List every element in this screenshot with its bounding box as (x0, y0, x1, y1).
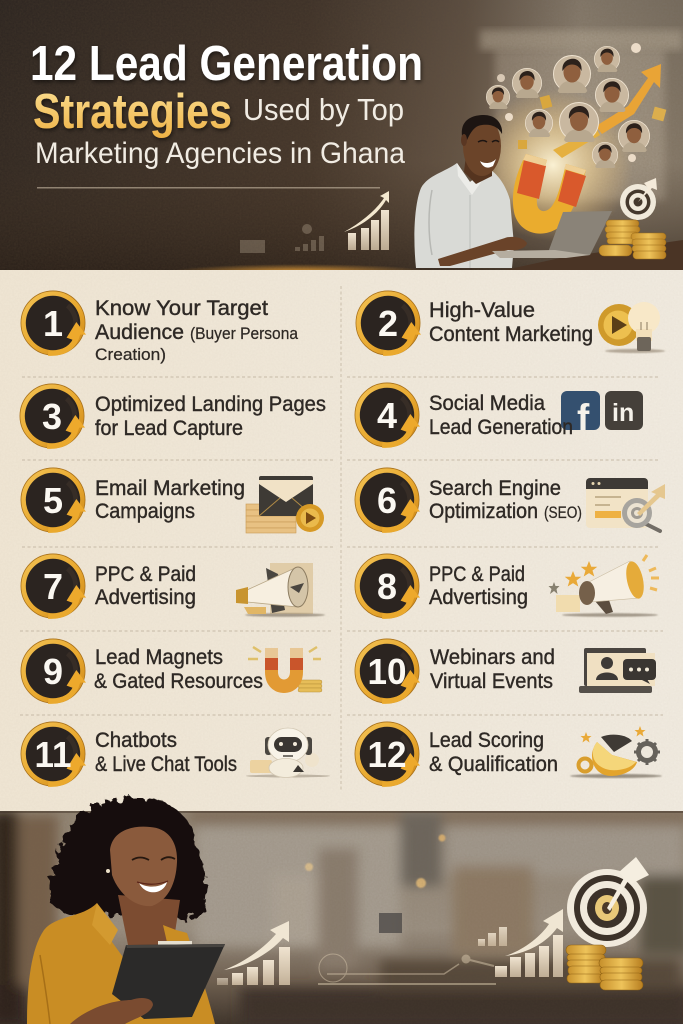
footer coins (566, 945, 643, 990)
item 11 (21, 722, 330, 786)
label 4 (429, 392, 573, 439)
magnet glow (473, 89, 633, 241)
badge 4 (355, 383, 420, 447)
label 6 (429, 477, 582, 523)
icon: facebook and linkedin: in (612, 399, 634, 427)
badge 5: 5 (43, 480, 63, 521)
item 12 (355, 722, 662, 786)
item 9 (21, 639, 322, 703)
badge 4: 4 (377, 395, 397, 436)
badge 7 (21, 554, 86, 618)
label 7 (95, 563, 196, 609)
label 10: Webinars and (430, 646, 555, 669)
label 3 (95, 393, 326, 440)
gold cubes and hearts (497, 43, 666, 162)
badge 9: 9 (43, 651, 63, 692)
footer chart: left (217, 921, 290, 985)
earring (106, 869, 110, 873)
title line 3: Marketing Agencies in Ghana (35, 137, 405, 170)
coin stacks (599, 220, 666, 259)
item 10 (355, 639, 656, 703)
header divider (37, 187, 380, 188)
man with laptop (414, 115, 527, 268)
hand (70, 998, 153, 1024)
label 10 (430, 646, 555, 693)
item 5 (21, 468, 324, 533)
icon: megaphone on box (236, 563, 325, 617)
icon: robot (246, 728, 330, 778)
neck and chest (118, 895, 180, 965)
label 9 (94, 646, 263, 693)
label 7: Advertising (95, 586, 196, 609)
label 6: (SEO) (544, 503, 582, 522)
label 10: Virtual Events (430, 670, 553, 693)
badge 6: 6 (377, 480, 397, 521)
label 1: Creation) (95, 345, 166, 364)
icon: megaphone with stars (548, 555, 659, 617)
head and neck (464, 155, 492, 184)
icon: email (246, 476, 324, 533)
label 5 (95, 477, 245, 523)
icon: magnet with coins (248, 647, 322, 693)
header small growth chart (240, 191, 389, 253)
item 3 (20, 384, 326, 448)
growth arrow (596, 64, 661, 134)
dartboard (620, 184, 656, 220)
icon: pie chart and gears (570, 726, 662, 778)
label 8: Advertising (429, 586, 528, 609)
hair (50, 797, 207, 919)
badge 5 (21, 468, 86, 532)
label 1: Audience (95, 321, 184, 344)
item 4 (355, 383, 643, 447)
label 8 (429, 563, 528, 609)
shirt (414, 163, 514, 268)
label 7: PPC & Paid (95, 563, 196, 586)
icon: play coin and light bulb (598, 302, 665, 353)
woman with clipboard (27, 797, 225, 1024)
label 6: Search Engine (429, 477, 561, 500)
laptop (492, 211, 612, 258)
icon: facebook and linkedin: f (577, 397, 590, 438)
badge 11 (21, 722, 86, 786)
label 5: Campaigns (95, 500, 195, 523)
label 8: PPC & Paid (429, 563, 525, 586)
badge 2 (356, 291, 421, 355)
badge 2: 2 (378, 303, 398, 344)
shirt (27, 903, 215, 1024)
label 11: & Live Chat Tools (95, 753, 237, 776)
badge 7: 7 (43, 566, 63, 607)
label 4: Lead Generation (429, 416, 573, 439)
icon: seo window and target (586, 478, 665, 531)
footer chart: right (478, 909, 563, 977)
label 11 (95, 729, 237, 776)
icon: facebook and linkedin (561, 391, 643, 438)
badge 11: 11 (34, 734, 72, 775)
footer connector lines (318, 954, 496, 984)
badge 3 (20, 384, 85, 448)
footer banner (0, 811, 683, 1024)
label 9: Lead Magnets (95, 646, 223, 669)
badge 10 (355, 639, 420, 703)
label 4: Social Media (429, 392, 545, 415)
arm and hands (438, 237, 527, 266)
label 12: Lead Scoring (429, 729, 544, 752)
label 1 (95, 297, 298, 364)
title line 1: 12 Lead Generation (30, 37, 423, 91)
badge 6 (355, 468, 420, 532)
title (30, 37, 423, 170)
panel: strategies (0, 270, 683, 811)
badge 9 (21, 639, 86, 703)
badge 3: 3 (42, 396, 62, 437)
label 9: & Gated Resources (94, 670, 263, 693)
footer target (567, 857, 649, 947)
badge 8: 8 (377, 566, 397, 607)
target and coins (599, 178, 666, 259)
header banner (0, 0, 683, 280)
badge 10: 10 (368, 651, 406, 692)
face (110, 827, 177, 906)
label 5: Email Marketing (95, 477, 245, 500)
icon: magnet attracting leads (473, 43, 666, 241)
magnet body (513, 154, 586, 234)
item 1 (21, 291, 298, 364)
item 2 (356, 291, 665, 355)
label 3: Optimized Landing Pages (95, 393, 326, 416)
badge 12 (355, 722, 420, 786)
label 2 (429, 299, 593, 346)
item 8 (355, 554, 659, 618)
item 7 (21, 554, 325, 618)
label 12 (429, 729, 558, 776)
badge 1: 1 (43, 303, 63, 344)
item 6 (355, 468, 665, 532)
badge 8 (355, 554, 420, 618)
label 6: Optimization (429, 500, 538, 523)
label 3: for Lead Capture (95, 417, 243, 440)
title line 2 highlighted: Strategies (33, 85, 232, 139)
badge 1 (21, 291, 86, 355)
label 1: Know Your Target (95, 297, 268, 320)
title line 2 suffix: Used by Top (243, 92, 404, 127)
label 12: & Qualification (429, 753, 558, 776)
icon: webinar laptop (579, 648, 656, 693)
clipboard (158, 941, 192, 945)
label 2: Content Marketing (429, 323, 593, 346)
badge 12: 12 (368, 734, 406, 775)
label 11: Chatbots (95, 729, 177, 752)
portraits (486, 46, 650, 171)
label 1: (Buyer Persona (190, 324, 298, 343)
table surface (505, 240, 683, 270)
label 2: High-Value (429, 299, 535, 322)
